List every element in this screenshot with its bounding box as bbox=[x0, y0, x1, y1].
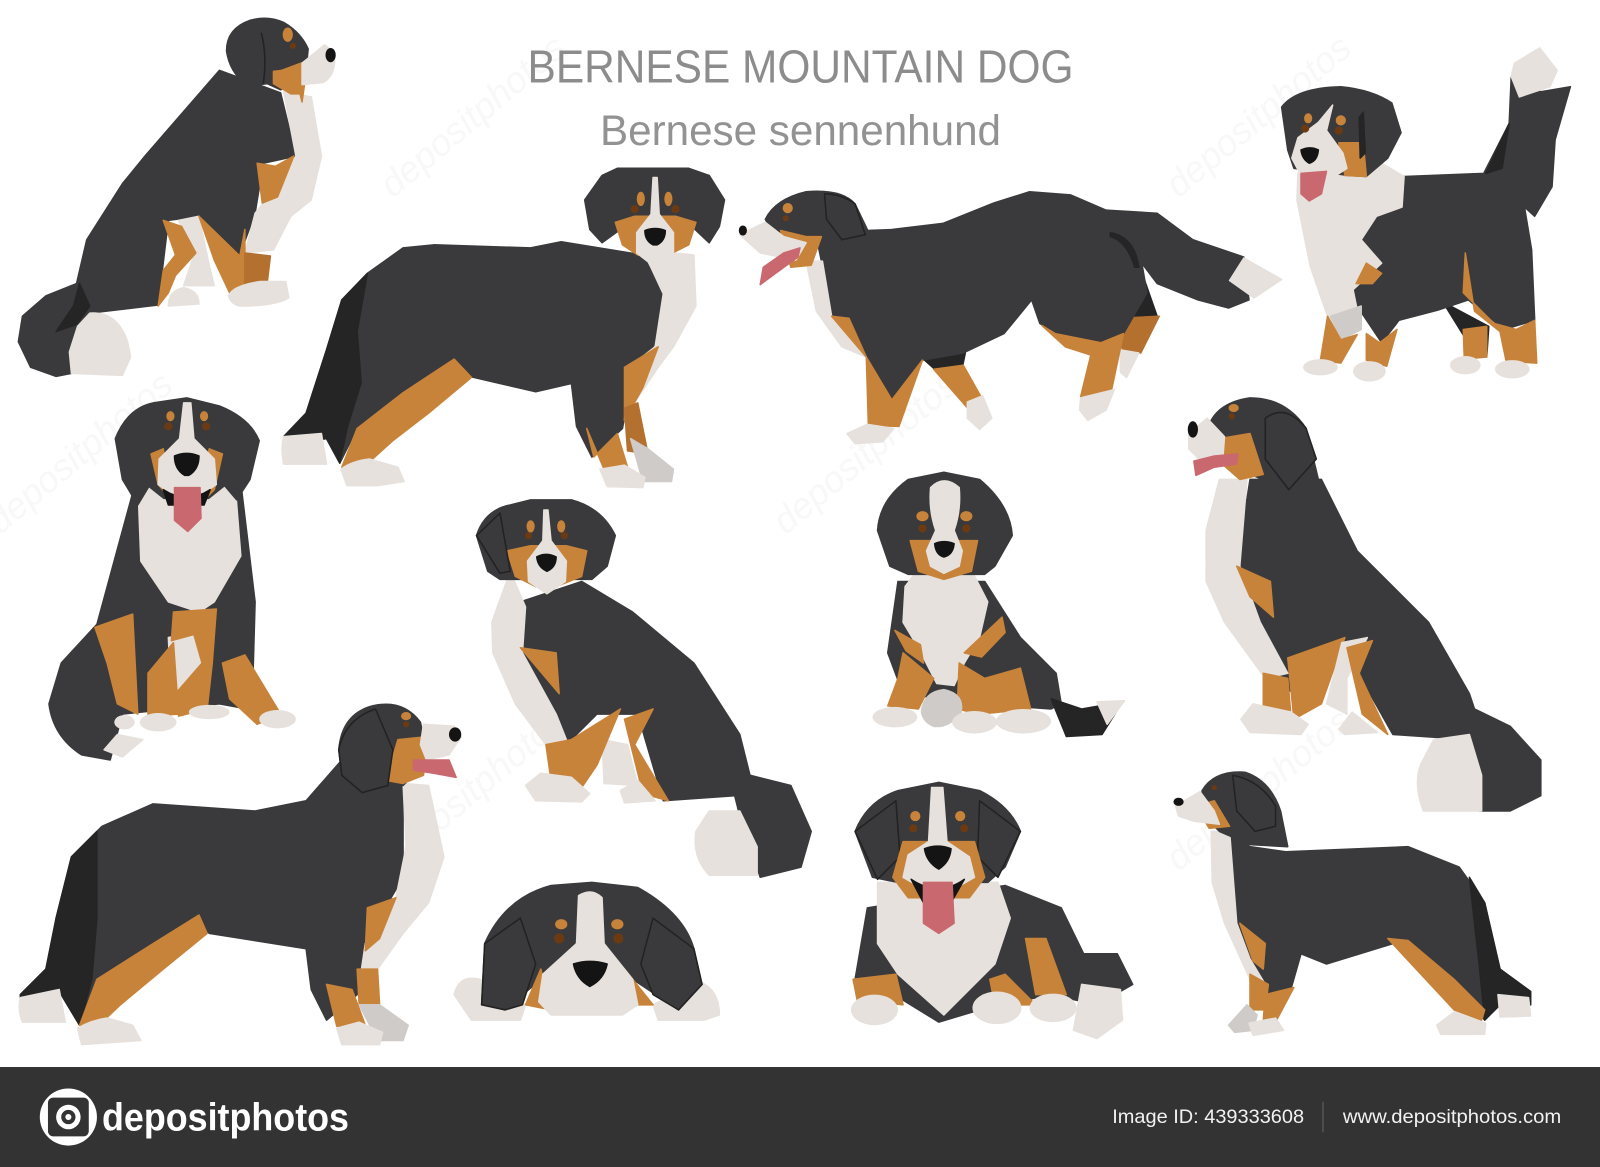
website url: www.depositphotos.com bbox=[1342, 1106, 1561, 1128]
dog 3: walking, facing left bbox=[739, 191, 1282, 444]
icon: depositphotos camera logo bbox=[40, 1088, 97, 1146]
footer band bbox=[0, 1067, 1600, 1167]
dog 8: large sitting, facing left bbox=[1188, 398, 1541, 811]
dog 5: sitting front view with tongue out bbox=[49, 398, 296, 760]
dog 6: sitting three-quarter view bbox=[477, 500, 811, 877]
title: BERNESE MOUNTAIN DOG bbox=[528, 41, 1073, 93]
infographic canvas: depositphotos bbox=[1157, 27, 1359, 205]
dog 2: standing, head toward viewer bbox=[282, 168, 724, 488]
infographic canvas: depositphotos bbox=[1157, 700, 1359, 878]
dog 12: standing in profile, bottom right bbox=[1173, 772, 1531, 1035]
dog 7: sitting puppy bbox=[872, 472, 1124, 737]
logo wordmark: depositphotos bbox=[102, 1096, 349, 1139]
subtitle: Bernese sennenhund bbox=[600, 107, 1001, 155]
infographic canvas: depositphotos bbox=[372, 700, 573, 878]
title bbox=[528, 41, 1073, 155]
image id: Image ID: 439333608 bbox=[1112, 1106, 1304, 1128]
dog 10: lying puppy head bbox=[454, 882, 719, 1020]
dog 11: lying puppy with tongue out bbox=[851, 782, 1133, 1038]
dog 4: standing with raised tail bbox=[1282, 48, 1570, 382]
infographic canvas: depositphotos bbox=[764, 363, 966, 542]
dog 9: standing in profile, bottom left bbox=[19, 704, 461, 1045]
dog 1: sitting in profile, facing right bbox=[18, 18, 336, 376]
infographic canvas: depositphotos bbox=[372, 27, 573, 205]
